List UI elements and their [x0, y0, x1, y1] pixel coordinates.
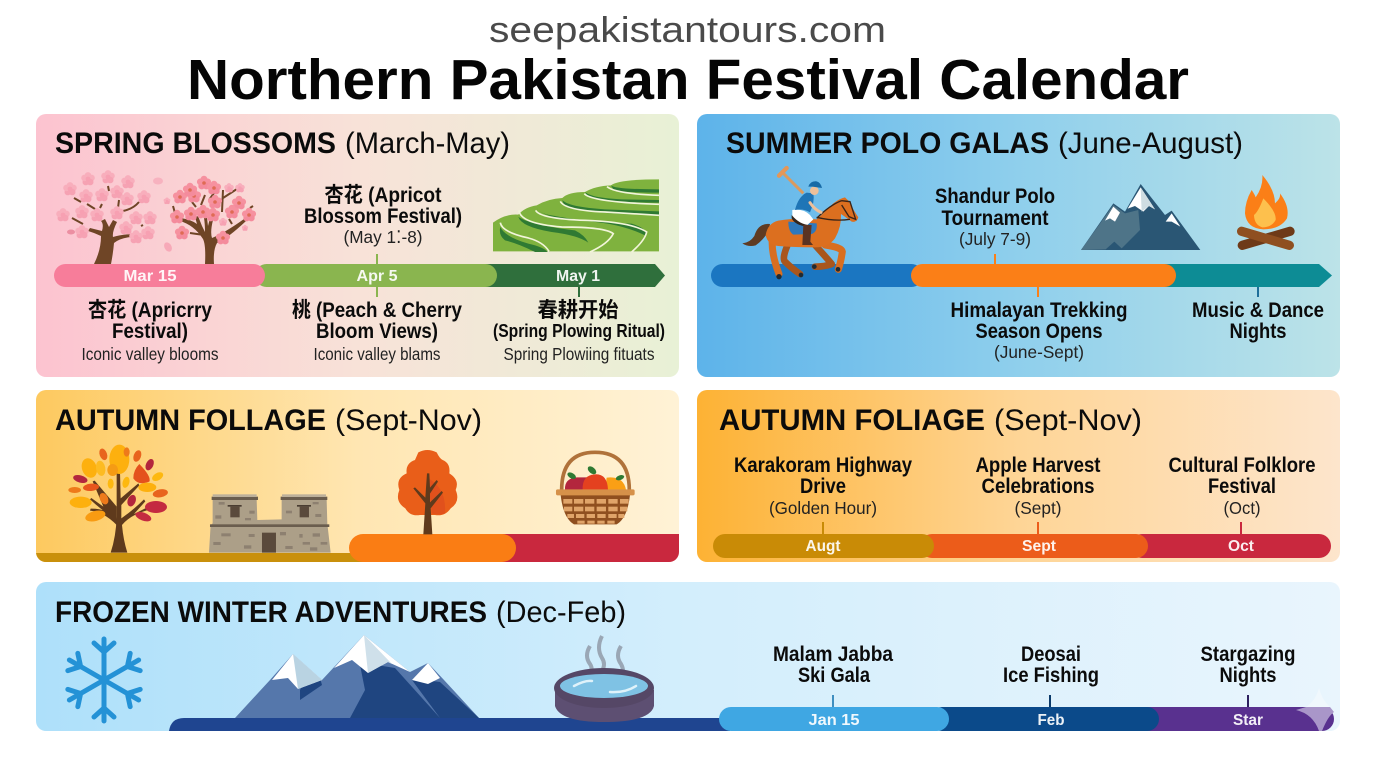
event: peach and cherry bloom views: Bloom Views) [316, 320, 438, 343]
autumn left background [36, 390, 679, 562]
icon: snowy mountains [1081, 184, 1200, 250]
event: himalayan trekking season opens: Himalayan Trekking [950, 299, 1128, 322]
timeline: autumn right: Oct [1228, 538, 1255, 555]
event: karakoram highway drive: Drive [800, 475, 846, 498]
panel: autumn foliage timeline [697, 390, 1340, 562]
event: shandur polo tournament [935, 185, 1055, 264]
event: deosai ice fishing: Deosai [1021, 643, 1081, 666]
event: peach and cherry bloom views: 桃 (Peach & Cherry [292, 299, 462, 322]
summer heading: (June-August) [1058, 127, 1243, 160]
title: Northern Pakistan Festival Calendar [187, 48, 1189, 112]
event: music and dance nights: Music & Dance [1192, 299, 1324, 322]
event: apricot festival: Festival) [112, 320, 188, 343]
event: spring plowing ritual: Spring Plowiing fituats [504, 344, 655, 364]
winter heading: (Dec-Feb) [496, 596, 626, 629]
event: apple harvest celebrations: Celebrations [982, 475, 1094, 498]
icon: stone fort [209, 494, 331, 553]
autumn left heading [55, 404, 482, 437]
event: apricot blossom festival: (May 1⁚-8) [344, 227, 422, 247]
icon: cherry tree right [164, 176, 256, 264]
event: shandur polo tournament: (July 7-9) [959, 229, 1031, 249]
spring heading: SPRING BLOSSOMS [55, 127, 336, 160]
event: apricot blossom festival [304, 184, 462, 264]
timeline: autumn right [713, 534, 1331, 558]
timeline: summer [711, 264, 1332, 287]
event: himalayan trekking season opens: (June-Sept) [994, 342, 1084, 362]
spring heading [55, 127, 510, 160]
event: cultural folklore festival [1168, 454, 1316, 534]
icon: apple basket [556, 452, 635, 524]
icon: orange tree [398, 450, 457, 534]
event: spring plowing ritual: (Spring Plowing Ritual) [493, 321, 665, 341]
winter panel background [36, 582, 1340, 731]
event: himalayan trekking season opens [950, 287, 1128, 362]
event: apricot festival [82, 299, 219, 364]
event: malam jabba ski gala [773, 643, 893, 707]
event: peach and cherry bloom views [292, 287, 462, 364]
event: music and dance nights [1192, 287, 1324, 343]
panel: autumn follage illustrations [36, 390, 690, 562]
icon: hot spring pool [554, 636, 654, 722]
event: cultural folklore festival: Festival [1208, 475, 1276, 498]
event: cultural folklore festival: Cultural Folklore [1168, 454, 1316, 477]
timeline: spring: Apr 5 [356, 268, 398, 285]
autumn left heading: (Sept-Nov) [335, 404, 482, 437]
summer panel background [697, 114, 1340, 377]
event: apricot festival: 杏花 (Apricrry [88, 299, 212, 322]
timeline: spring: May 1 [556, 268, 600, 285]
timeline: winter: Feb [1038, 712, 1065, 729]
timeline: winter: Star [1233, 712, 1263, 729]
timeline: spring [54, 264, 665, 287]
icon: snowflake [64, 639, 144, 721]
event: spring plowing ritual: 春耕开始 [538, 299, 618, 322]
event: stargazing nights: Stargazing [1200, 643, 1296, 666]
event: karakoram highway drive: Karakoram Highway [734, 454, 912, 477]
autumn right heading: (Sept-Nov) [994, 404, 1142, 437]
autumn right heading [719, 404, 1142, 437]
event: karakoram highway drive: (Golden Hour) [769, 498, 877, 518]
event: apple harvest celebrations: (Sept) [1014, 498, 1062, 518]
event: apricot blossom festival: Blossom Festival) [304, 205, 462, 228]
event: deosai ice fishing: Ice Fishing [1003, 664, 1099, 687]
event: malam jabba ski gala: Ski Gala [798, 664, 870, 687]
event: apple harvest celebrations: Apple Harvest [976, 454, 1101, 477]
autumn right heading: AUTUMN FOLIAGE [719, 404, 985, 437]
panel: frozen winter adventures [36, 582, 1340, 731]
panel: spring blossoms [36, 114, 679, 377]
summer heading: SUMMER POLO GALAS [726, 127, 1049, 160]
timeline: autumn right: Sept [1022, 538, 1057, 555]
timeline: spring: Mar 15 [124, 268, 177, 285]
icon: campfire [1242, 175, 1290, 245]
event: stargazing nights [1200, 643, 1296, 707]
event: malam jabba ski gala: Malam Jabba [773, 643, 893, 666]
summer heading [726, 127, 1243, 160]
timeline: autumn right: Augt [806, 538, 841, 555]
timeline: autumn left ground [36, 534, 690, 562]
icon: star sparkle [1306, 688, 1330, 707]
winter heading: FROZEN WINTER ADVENTURES [55, 596, 487, 629]
website name: seepakistantours.com [489, 9, 886, 50]
spring heading: (March-May) [345, 127, 510, 160]
event: stargazing nights: Nights [1220, 664, 1276, 687]
event: music and dance nights: Nights [1230, 320, 1286, 343]
event: deosai ice fishing [1003, 643, 1099, 707]
event: shandur polo tournament: Tournament [942, 207, 1049, 230]
autumn left heading: AUTUMN FOLLAGE [55, 404, 326, 437]
timeline: winter [169, 707, 1334, 731]
timeline: winter: Jan 15 [808, 712, 860, 729]
event: apricot blossom festival: 杏花 (Apricot [324, 184, 442, 207]
event: himalayan trekking season opens: Season Opens [976, 320, 1102, 343]
event: shandur polo tournament: Shandur Polo [935, 185, 1055, 208]
icon: winter mountains [235, 635, 479, 718]
event: apple harvest celebrations [976, 454, 1101, 534]
event: peach and cherry bloom views: Iconic valley blams [314, 344, 441, 364]
event: karakoram highway drive [734, 454, 912, 534]
event: cultural folklore festival: (Oct) [1224, 498, 1260, 518]
icon: polo rider on horse [742, 168, 858, 279]
event: spring plowing ritual [493, 287, 665, 364]
spring panel background [36, 114, 679, 377]
icon: cherry tree left [56, 170, 157, 264]
icon: falling petals [153, 178, 174, 253]
autumn right background [697, 390, 1340, 562]
icon: green terraces [493, 179, 659, 252]
event: apricot festival: Iconic valley blooms [82, 344, 219, 364]
panel: summer polo galas [697, 114, 1340, 377]
icon: autumn tree [68, 445, 169, 553]
